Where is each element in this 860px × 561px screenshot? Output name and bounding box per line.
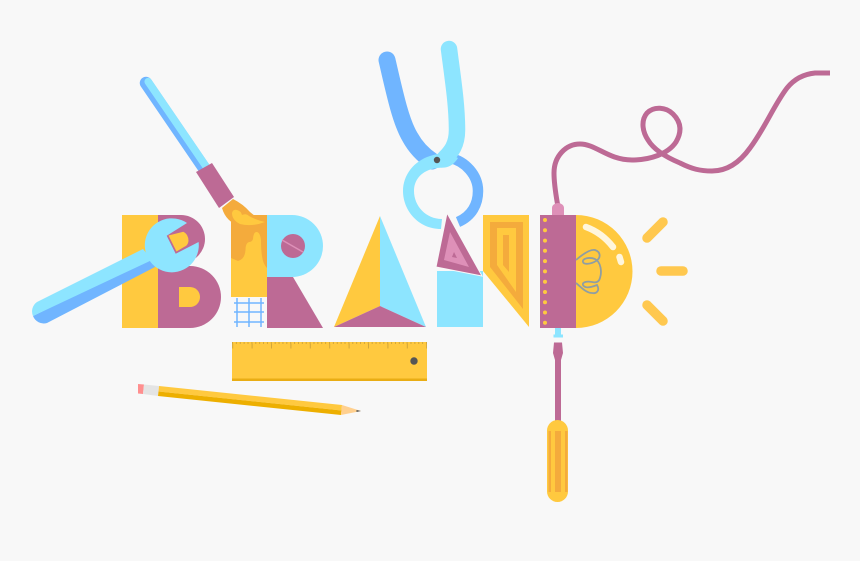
power cord (552, 73, 830, 215)
filament (576, 250, 601, 293)
letter R (231, 215, 323, 328)
letter I (436, 213, 483, 327)
highlight (586, 227, 621, 262)
icon: wrench (32, 218, 199, 323)
icon: pencil (138, 384, 361, 415)
letter D: light bulb (540, 215, 632, 328)
icon: screwdriver (547, 342, 568, 502)
light rays (647, 222, 683, 321)
letter B (122, 215, 221, 328)
icon: pliers (387, 49, 478, 229)
rivets (543, 218, 547, 325)
icon: screw (554, 328, 563, 338)
icon: paint brush (146, 82, 265, 226)
icon: ruler (232, 342, 427, 381)
icon: grid (234, 298, 264, 327)
letter N (483, 215, 529, 327)
letter A (334, 216, 426, 327)
